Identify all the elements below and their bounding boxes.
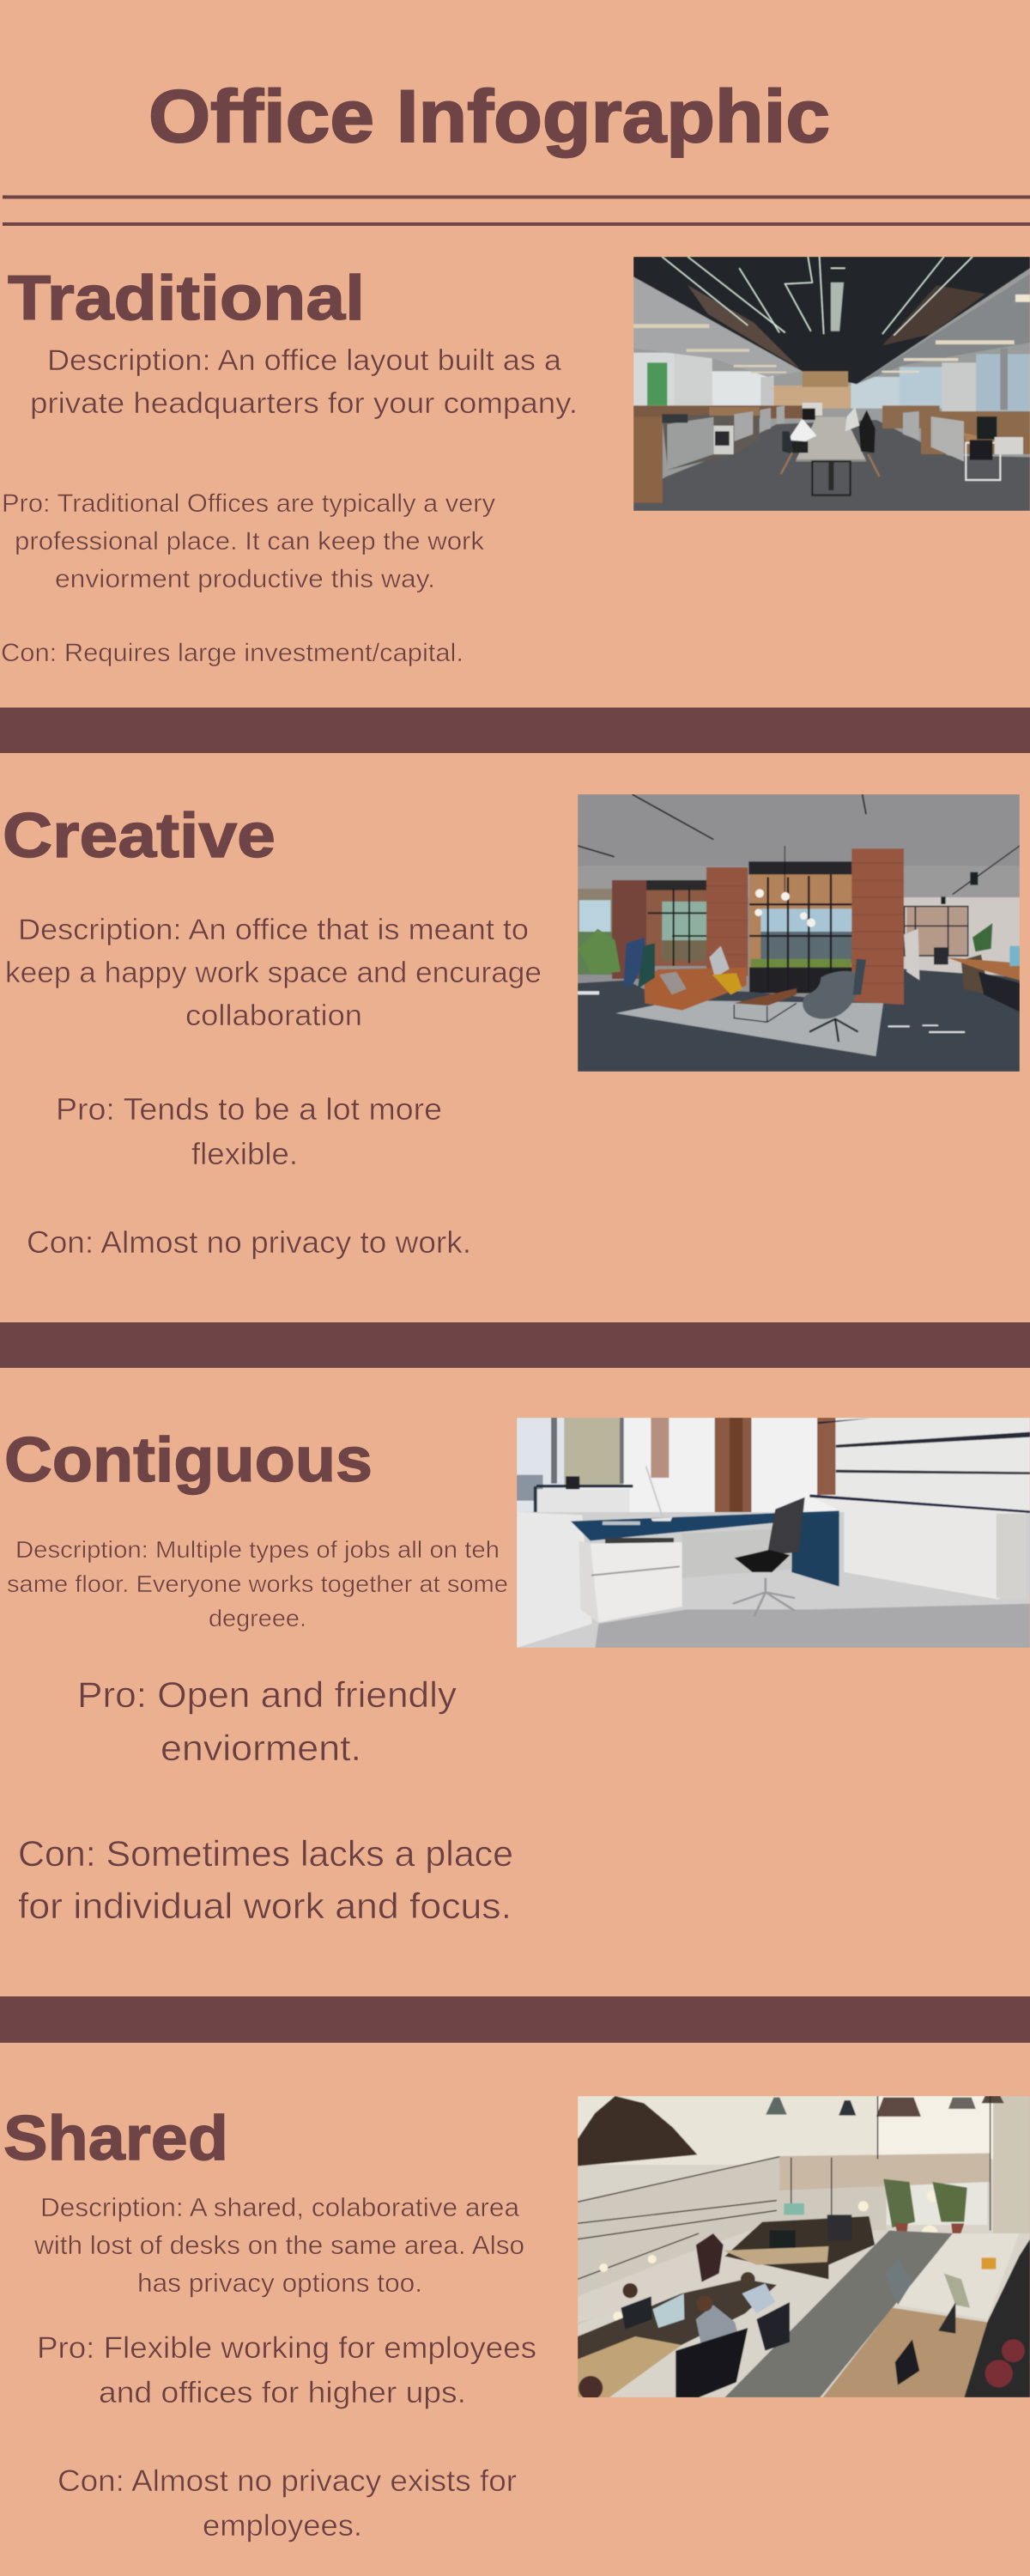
- heading: traditional: Traditional: [8, 264, 365, 333]
- text: creative description: collaboration: [185, 999, 362, 1032]
- text: contiguous con: Con: Sometimes lacks a place: [18, 1833, 513, 1874]
- text: traditional pro: [2, 489, 495, 593]
- photo: contiguous desk with cabinets: [517, 1418, 1030, 1648]
- photo: shared coworking hall: [578, 2096, 1030, 2397]
- text: traditional description: [30, 344, 578, 420]
- text: creative pro: flexible.: [191, 1136, 298, 1171]
- text: traditional description: private headquarters for your company.: [30, 387, 578, 420]
- text: contiguous con: [18, 1833, 513, 1926]
- heading: shared: Shared: [3, 2104, 228, 2173]
- divider band 1: [0, 708, 1030, 753]
- text: contiguous description: degreee.: [209, 1605, 306, 1631]
- heading: creative: Creative: [3, 801, 276, 871]
- text: shared pro: [37, 2331, 536, 2409]
- text: shared description: [33, 2192, 524, 2298]
- text: shared description: Description: A shared, colaborative area: [40, 2192, 520, 2222]
- divider band 3: [0, 1996, 1030, 2043]
- text: creative pro: Pro: Tends to be a lot more: [56, 1091, 442, 1127]
- text: creative con: Con: Almost no privacy to work.: [27, 1224, 471, 1260]
- text: creative pro: [56, 1091, 442, 1171]
- text: contiguous description: Description: Multiple types of jobs all on teh: [15, 1536, 500, 1563]
- text: shared con: employees.: [203, 2509, 362, 2543]
- text: creative description: [5, 914, 542, 1032]
- text: traditional pro: professional place. It can keep the work: [15, 527, 485, 556]
- text: shared description: has privacy options too.: [137, 2268, 422, 2298]
- text: shared pro: and offices for higher ups.: [99, 2376, 466, 2409]
- text: contiguous con: for individual work and focus.: [18, 1886, 512, 1926]
- text: traditional con: Con: Requires large investment/capital.: [1, 639, 464, 667]
- text: contiguous pro: Pro: Open and friendly: [77, 1674, 457, 1715]
- text: shared con: Con: Almost no privacy exists for: [58, 2464, 517, 2498]
- panel: traditional: [1, 257, 1030, 667]
- text: creative description: keep a happy work space and encurage: [5, 957, 542, 989]
- photo: creative lounge office: [578, 794, 1020, 1072]
- text: shared pro: Pro: Flexible working for employees: [37, 2331, 536, 2365]
- text: contiguous pro: enviorment.: [161, 1728, 361, 1768]
- text: shared con: [58, 2464, 517, 2543]
- panel: shared: [3, 2096, 1030, 2543]
- text: contiguous description: [7, 1536, 508, 1631]
- text: shared description: with lost of desks on the same area. Also: [33, 2230, 524, 2260]
- panel: contiguous: [4, 1418, 1030, 1926]
- text: traditional pro: Pro: Traditional Offices are typically a very: [2, 489, 495, 518]
- text: creative description: Description: An office that is meant to: [18, 914, 529, 946]
- text: contiguous pro: [77, 1674, 457, 1768]
- text: traditional description: Description: An office layout built as a: [47, 344, 561, 377]
- heading: contiguous: Contiguous: [4, 1425, 373, 1495]
- divider band 2: [0, 1322, 1030, 1368]
- text: contiguous description: same floor. Everyone works together at some: [7, 1571, 508, 1597]
- title: Office Infographic: [148, 76, 830, 158]
- text: traditional pro: enviorment productive this way.: [55, 565, 435, 593]
- panel: creative: [3, 794, 1020, 1260]
- photo: traditional open-plan office: [633, 257, 1030, 511]
